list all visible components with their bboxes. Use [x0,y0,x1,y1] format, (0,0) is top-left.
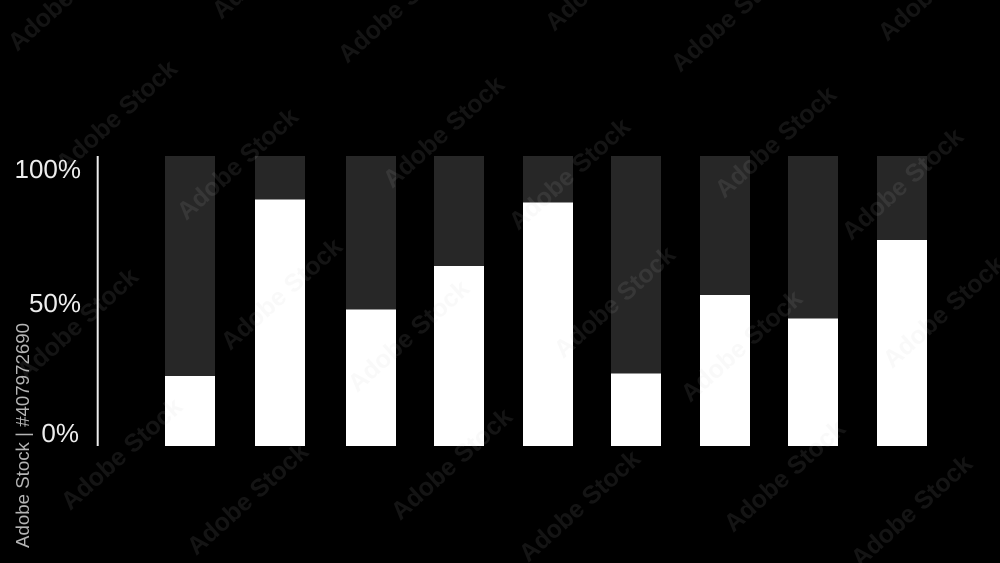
y axis with percentage labels: 0% [41,418,79,448]
y axis with percentage labels: 50% [29,288,81,318]
vertical stock id text: Adobe Stock | #407972690 [13,323,33,548]
bar 6 [611,156,661,446]
stock watermarks: Adobe Stock [172,102,304,226]
stock watermarks: Adobe Stock [504,112,636,236]
stock watermarks: Adobe Stock [12,262,144,386]
stock watermarks: Adobe Stock [216,232,348,356]
stock watermarks: Adobe Stock [710,80,842,204]
stock watermarks: Adobe Stock [676,284,808,408]
stock watermarks: Adobe Stock [56,392,188,516]
bar 1 [165,156,215,446]
bars: nine stacked columns [165,156,927,446]
bar 5 [523,156,573,446]
stock watermarks: Adobe Stock [51,54,183,178]
bar 7 [700,156,750,446]
y axis with percentage labels: 100% [14,154,81,184]
stock watermarks: Adobe Stock [549,240,681,364]
stock watermarks: Adobe Stock [837,122,969,246]
y axis with percentage labels [14,154,99,448]
bar 4 [434,156,484,446]
stock watermarks: Adobe Stock [343,274,475,398]
bar 9 [877,156,927,446]
bar 2 [255,156,305,446]
stock watermarks: Adobe Stock [386,402,518,526]
stock watermarks: Adobe Stock [719,414,851,538]
stock watermarks: Adobe Stock [182,437,314,561]
bar 3 [346,156,396,446]
stock watermarks: Adobe Stock [378,70,510,194]
bar 8 [788,156,838,446]
